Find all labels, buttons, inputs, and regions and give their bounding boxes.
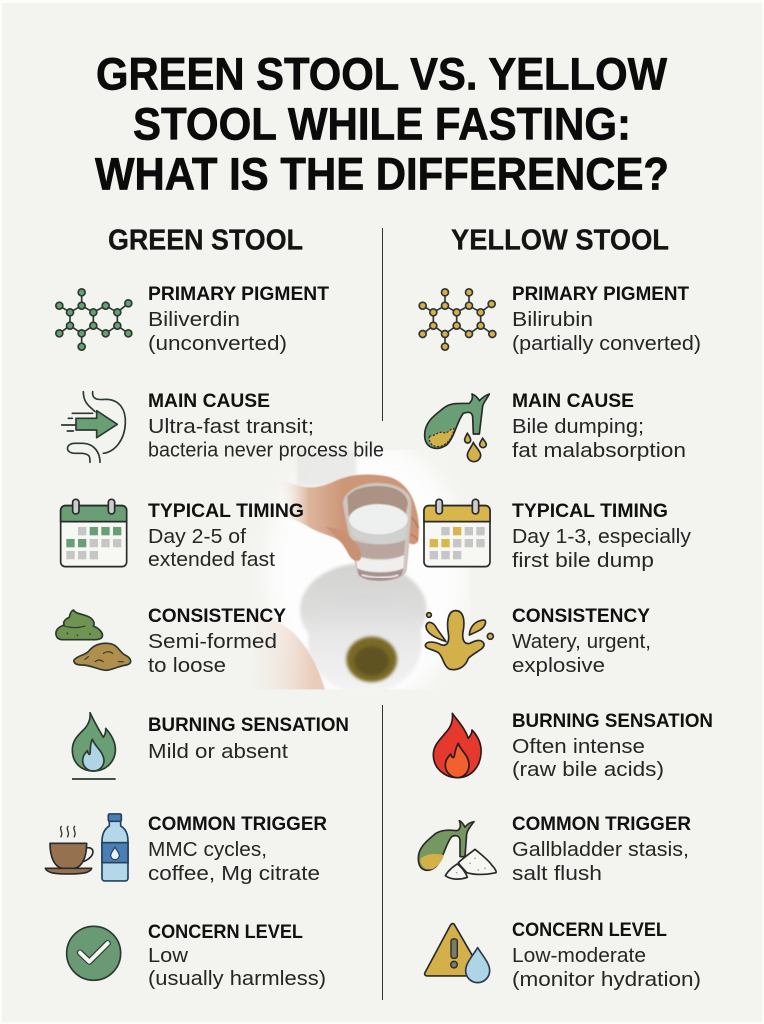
text: yellow burning sensation: BURNING SENSATION [512,710,713,732]
text: green main cause [148,390,384,462]
text: green typical timing: Day 2-5 of [148,525,246,548]
text: yellow main cause: MAIN CAUSE [512,390,634,412]
text: green consistency: to loose [148,654,226,677]
text: yellow primary pigment: (partially converted) [512,332,701,355]
text: green consistency: Semi-formed [148,630,277,653]
icon: gallbladder dumping bile [425,394,489,462]
text: yellow concern level: CONCERN LEVEL [512,919,667,941]
text: green common trigger: MMC cycles, [148,838,267,861]
column heading: green stool: GREEN STOOL [108,224,303,256]
text: green concern level [148,921,326,990]
icon: yellow molecule [419,289,496,350]
text: yellow burning sensation: Often intense [512,735,645,758]
icon: green check circle [67,926,121,980]
text: yellow typical timing [512,500,692,572]
text: green common trigger: coffee, Mg citrate [148,862,320,885]
text: yellow consistency: Watery, urgent, [512,630,651,653]
text: green primary pigment [148,283,329,355]
icon: gallbladder stasis and salt [418,821,496,879]
text: yellow burning sensation [512,710,713,781]
text: green consistency [148,605,286,677]
text: yellow consistency: explosive [512,654,605,677]
text: yellow consistency [512,605,651,677]
text: yellow concern level [512,919,701,991]
title: GREEN STOOL VS. YELLOW [96,48,667,100]
text: yellow primary pigment: PRIMARY PIGMENT [512,283,689,305]
text: yellow common trigger: COMMON TRIGGER [512,813,691,835]
text: yellow concern level: (monitor hydration) [512,968,701,991]
text: green main cause: bacteria never process bile [148,438,384,462]
icon: green molecule [56,289,132,350]
text: yellow main cause: Bile dumping; [512,415,644,438]
text: yellow typical timing: first bile dump [512,549,654,572]
icon: intense red flame [433,713,481,778]
text: yellow burning sensation: (raw bile acids) [512,758,664,781]
text: green main cause: MAIN CAUSE [148,390,270,412]
icon: green and brown stool piles [56,610,131,670]
icon: green calendar [61,499,127,567]
photo: hand holding water glass over toilet [268,450,464,690]
text: green typical timing: extended fast [148,548,275,571]
text: green burning sensation: Mild or absent [148,740,288,763]
icon: mild green flame [72,713,116,779]
title: STOOL WHILE FASTING: [133,98,631,150]
text: yellow common trigger [512,813,691,885]
text: yellow main cause [512,390,686,462]
column heading: yellow stool: YELLOW STOOL [451,224,669,256]
icon: fast transit gut [62,392,125,462]
text: yellow consistency: CONSISTENCY [512,605,650,627]
text: yellow primary pigment: Bilirubin [512,308,593,331]
icon: yellow watery splash [425,611,493,670]
text: green common trigger [148,813,327,885]
text: green typical timing [148,500,304,571]
text: green primary pigment: (unconverted) [148,332,287,355]
text: yellow concern level: Low-moderate [512,944,646,967]
text: green burning sensation: BURNING SENSATION [148,714,349,736]
title [95,48,669,200]
icon: warning triangle and water drop [425,924,490,983]
text: yellow primary pigment [512,283,701,355]
text: green main cause: Ultra-fast transit; [148,415,314,438]
text: yellow typical timing: Day 1-3, especially [512,525,692,548]
text: green concern level: CONCERN LEVEL [148,921,303,943]
text: yellow common trigger: salt flush [512,862,602,885]
text: green burning sensation [148,714,349,763]
text: yellow typical timing: TYPICAL TIMING [512,500,668,522]
text: yellow common trigger: Gallbladder stasis, [512,838,689,861]
text: green primary pigment: PRIMARY PIGMENT [148,283,329,305]
title: WHAT IS THE DIFFERENCE? [95,148,669,200]
text: green consistency: CONSISTENCY [148,605,286,627]
icon: yellow calendar [424,499,490,567]
text: green typical timing: TYPICAL TIMING [148,500,304,522]
text: green concern level: (usually harmless) [148,967,326,990]
text: yellow main cause: fat malabsorption [512,439,686,462]
text: green primary pigment: Biliverdin [148,308,240,331]
icon: coffee cup and water bottle [45,814,128,881]
text: green concern level: Low [148,944,188,967]
text: green common trigger: COMMON TRIGGER [148,813,327,835]
